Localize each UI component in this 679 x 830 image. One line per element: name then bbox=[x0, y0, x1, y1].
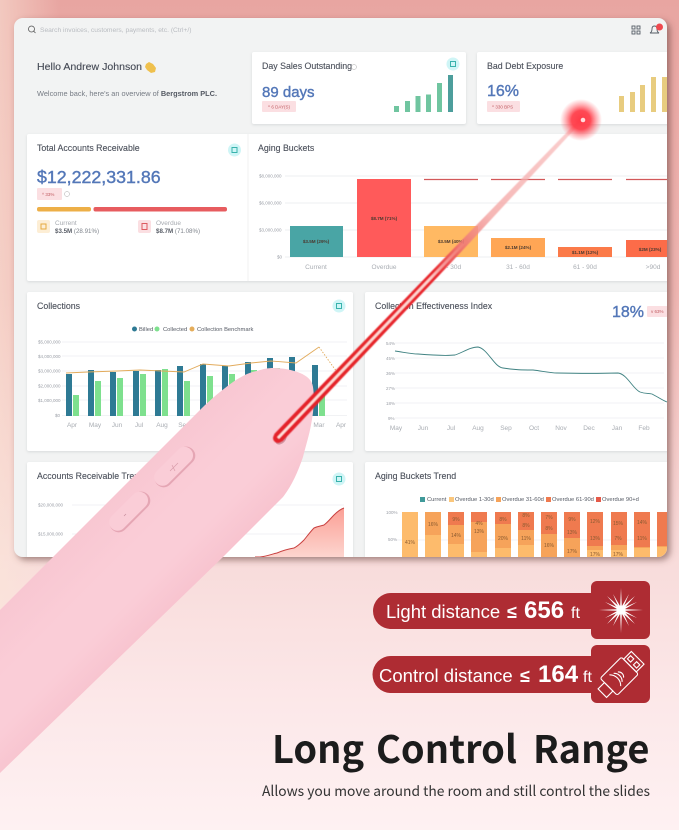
aging buckets chart: $0 bbox=[277, 254, 283, 260]
badge: light distance bbox=[373, 581, 650, 639]
badge: control distance bbox=[372, 645, 650, 703]
panel: collections: Aug bbox=[156, 422, 168, 429]
aging buckets chart: $6,000,000 bbox=[259, 200, 282, 206]
panel: collections: Jul bbox=[135, 422, 144, 429]
panel: accounts receivable trend: $15,000,000 bbox=[38, 532, 64, 536]
stacked bar chart: 9% bbox=[452, 517, 460, 523]
panel: collection effectiveness index: Feb bbox=[638, 425, 650, 432]
badge: light distance: Light distance bbox=[386, 601, 500, 622]
panel: collections: Sep bbox=[178, 422, 190, 429]
panel: collection effectiveness index: May bbox=[390, 425, 403, 432]
panel: collections: $4,000,000 bbox=[38, 354, 61, 359]
panel: collection effectiveness index: Sep bbox=[500, 425, 512, 432]
search bar: Search invoices, customers, payments, etc. (Ctrl+/) bbox=[40, 27, 191, 34]
panel: collections: Apr bbox=[67, 422, 78, 429]
icon: app grid bbox=[632, 26, 640, 34]
laser beam and dot bbox=[273, 99, 602, 447]
panel: collection effectiveness index bbox=[365, 292, 672, 451]
aging buckets chart: $8,000,000 bbox=[259, 174, 282, 178]
stacked bar chart: 11% bbox=[521, 536, 531, 542]
stacked bar chart: 13% bbox=[567, 530, 578, 536]
dashboard window bbox=[14, 18, 673, 562]
panel: collection effectiveness index: 36% bbox=[386, 371, 395, 376]
icon: notification bell bbox=[650, 24, 663, 33]
greeting bbox=[37, 62, 217, 98]
badge: light distance: 656 bbox=[524, 597, 564, 624]
panel: collections: Apr bbox=[336, 422, 347, 429]
panel: collections: $0 bbox=[55, 413, 61, 418]
panel: collections: $5,000,000 bbox=[38, 340, 61, 344]
panel: collections: $1,000,000 bbox=[38, 398, 61, 403]
line chart bbox=[395, 347, 667, 402]
stacked bar chart: 4% bbox=[475, 521, 483, 527]
bar chart: billed bbox=[66, 357, 318, 416]
stacked bar chart: 11% bbox=[637, 536, 647, 542]
overdue stat: $8.7M (71.08%) bbox=[156, 228, 200, 235]
aging buckets chart bbox=[258, 143, 671, 271]
panel: collections bbox=[27, 292, 353, 451]
aging buckets chart: $3.5M (29%) bbox=[303, 239, 330, 244]
panel: accounts receivable trend: $20,000,000 bbox=[38, 502, 64, 508]
panel: accounts receivable trend bbox=[27, 462, 353, 562]
legend: Collected bbox=[163, 327, 187, 333]
panel: collections: $3,000,000 bbox=[38, 368, 61, 374]
button: lower bbox=[106, 488, 154, 536]
panel: collection effectiveness index: 27% bbox=[386, 386, 395, 391]
stacked bar chart: 14% bbox=[637, 520, 648, 526]
total accounts receivable: $12,222,331.86 bbox=[37, 167, 161, 187]
stacked bar chart: 8% bbox=[545, 526, 553, 532]
stacked bar chart: 20% bbox=[498, 536, 509, 542]
icon: laser starburst bbox=[599, 588, 643, 633]
icon: expand bbox=[332, 472, 346, 486]
panel: collections: Mar bbox=[313, 422, 325, 429]
aging buckets chart: $1.1M (12%) bbox=[572, 250, 599, 255]
panel: accounts receivable trend: Accounts Receivable Trend bbox=[37, 471, 144, 481]
legend bbox=[132, 326, 254, 332]
card: day sales outstanding: 89 days bbox=[262, 84, 315, 101]
current stat: Current bbox=[55, 220, 77, 227]
overdue stat: Overdue bbox=[156, 220, 181, 227]
stacked bar chart: 14% bbox=[451, 533, 462, 539]
aging buckets chart: 31 - 60d bbox=[506, 264, 530, 271]
current stat bbox=[37, 220, 99, 235]
panel: collection effectiveness index: 9% bbox=[388, 416, 395, 421]
icon: expand bbox=[446, 58, 460, 70]
card: bad debt exposure: Bad Debt Exposure bbox=[487, 61, 563, 71]
badge: control distance: ft bbox=[583, 669, 592, 686]
legend: Current bbox=[427, 497, 447, 503]
icon: waving hand bbox=[145, 62, 156, 73]
stacked bar chart: 13% bbox=[590, 536, 601, 542]
aging buckets chart: >90d bbox=[646, 264, 661, 271]
panel: collections: Jun bbox=[112, 422, 123, 429]
legend bbox=[420, 497, 638, 502]
aging buckets chart: $2M (23%) bbox=[639, 247, 662, 252]
stacked bar chart: 7% bbox=[545, 515, 553, 521]
card: bad debt exposure bbox=[477, 52, 672, 124]
button: upper bbox=[151, 443, 199, 491]
aging buckets chart: Aging Buckets bbox=[258, 143, 315, 153]
stacked bar chart: 16% bbox=[544, 543, 555, 549]
area chart bbox=[255, 508, 344, 560]
stacked bar chart bbox=[402, 512, 673, 558]
card: bad debt exposure: 16% bbox=[487, 83, 519, 100]
aging buckets chart: 1 - 30d bbox=[441, 264, 461, 271]
aging buckets chart: $3.5M (40%) bbox=[438, 239, 465, 244]
subheading: Allows you move around the room and still control the slides bbox=[262, 781, 650, 801]
panel: accounts receivable and aging buckets bbox=[27, 134, 672, 281]
aperture shadow bbox=[273, 431, 289, 447]
panel: aging buckets trend: Aging Buckets Trend bbox=[375, 471, 456, 481]
stacked bar chart: 8% bbox=[499, 517, 507, 523]
greeting: Welcome back, here's an overview of Bergstrom PLC. bbox=[37, 89, 217, 98]
legend: Collection Benchmark bbox=[197, 327, 253, 333]
panel: aging buckets trend bbox=[365, 462, 673, 562]
bar chart: collected bbox=[73, 368, 325, 416]
legend: Overdue 90+d bbox=[602, 497, 639, 503]
panel: aging buckets trend: 100% bbox=[386, 510, 398, 515]
total accounts receivable: ^ 33% bbox=[42, 192, 54, 197]
icon: USB receiver bbox=[594, 649, 646, 702]
stacked bar chart: 17% bbox=[590, 552, 601, 558]
heading: Long bbox=[272, 719, 365, 774]
icon: expand bbox=[332, 300, 346, 312]
stacked bar chart: 12% bbox=[590, 519, 601, 525]
card: day sales outstanding: Day Sales Outstanding bbox=[262, 61, 352, 71]
aging buckets chart: 61 - 90d bbox=[573, 264, 597, 271]
panel: collections: May bbox=[89, 422, 102, 429]
legend: Overdue 1-30d bbox=[455, 497, 494, 503]
badge: light distance: ft bbox=[571, 605, 580, 622]
stacked bar chart: 13% bbox=[474, 529, 485, 535]
card: day sales outstanding: ^ 6 DAY(S) bbox=[268, 104, 291, 110]
heading: Control bbox=[376, 719, 517, 774]
heading: Range bbox=[533, 719, 649, 774]
stacked bar chart: 8% bbox=[522, 523, 530, 529]
panel: collection effectiveness index: v 63% bbox=[651, 309, 664, 314]
aging buckets chart: Overdue bbox=[372, 264, 397, 271]
overdue stat bbox=[138, 220, 200, 235]
bar chart: bad debt sparkline bbox=[619, 77, 667, 112]
panel: collection effectiveness index: 54% bbox=[386, 341, 395, 346]
panel: collection effectiveness index: 18% bbox=[386, 401, 395, 406]
panel: collection effectiveness index: Collection Effectiveness Index bbox=[375, 301, 493, 311]
greeting: Hello Andrew Johnson bbox=[37, 62, 142, 73]
current stat: $3.5M (28.91%) bbox=[55, 228, 99, 235]
bar chart: DSO sparkline bbox=[394, 75, 453, 112]
badge: control distance: 164 bbox=[538, 661, 579, 688]
stacked bar chart: 16% bbox=[428, 522, 439, 528]
panel: collection effectiveness index: Dec bbox=[583, 425, 596, 432]
stacked bar chart: 8% bbox=[522, 513, 530, 519]
badge: control distance: Control distance bbox=[379, 665, 513, 686]
card: day sales outstanding bbox=[252, 52, 466, 124]
stacked bar chart: 7% bbox=[614, 536, 622, 542]
stacked bar chart: 17% bbox=[613, 552, 624, 558]
panel: aging buckets trend: 50% bbox=[388, 537, 397, 542]
aging buckets chart: Current bbox=[305, 264, 327, 271]
panel: collection effectiveness index: Aug bbox=[472, 425, 484, 432]
progress bar bbox=[37, 207, 227, 212]
panel: collection effectiveness index: Jul bbox=[447, 425, 456, 432]
panel: collection effectiveness index: Nov bbox=[555, 425, 568, 432]
legend: Billed bbox=[139, 327, 153, 333]
aging buckets chart: $8.7M (71%) bbox=[371, 216, 398, 221]
total accounts receivable: Total Accounts Receivable bbox=[37, 143, 140, 153]
aging buckets chart: $3,000,000 bbox=[259, 228, 282, 232]
badge: light distance: ≤ bbox=[507, 602, 517, 622]
panel: collection effectiveness index: Oct bbox=[529, 425, 539, 432]
panel: collections: $2,000,000 bbox=[38, 384, 61, 388]
presenter remote body bbox=[0, 368, 314, 773]
stacked bar chart: 17% bbox=[567, 549, 578, 555]
card: bad debt exposure: ^ 330 BPS bbox=[492, 104, 513, 110]
stacked bar chart: 15% bbox=[613, 521, 624, 527]
legend: Overdue 31-60d bbox=[502, 497, 544, 503]
panel: collection effectiveness index: Jan bbox=[612, 425, 623, 432]
stacked bar chart: 9% bbox=[568, 517, 576, 523]
panel: collection effectiveness index: 18% bbox=[612, 304, 644, 321]
badge: control distance: ≤ bbox=[520, 666, 530, 686]
aging buckets chart: $2.1M (24%) bbox=[505, 245, 532, 250]
panel: collection effectiveness index: 45% bbox=[386, 356, 395, 361]
stacked bar chart: 41% bbox=[405, 540, 416, 546]
panel: collection effectiveness index: Jun bbox=[418, 425, 429, 432]
legend: Overdue 61-90d bbox=[552, 497, 594, 503]
total accounts receivable bbox=[37, 143, 241, 235]
benchmark line bbox=[66, 346, 336, 374]
panel: collections: Collections bbox=[37, 301, 81, 311]
